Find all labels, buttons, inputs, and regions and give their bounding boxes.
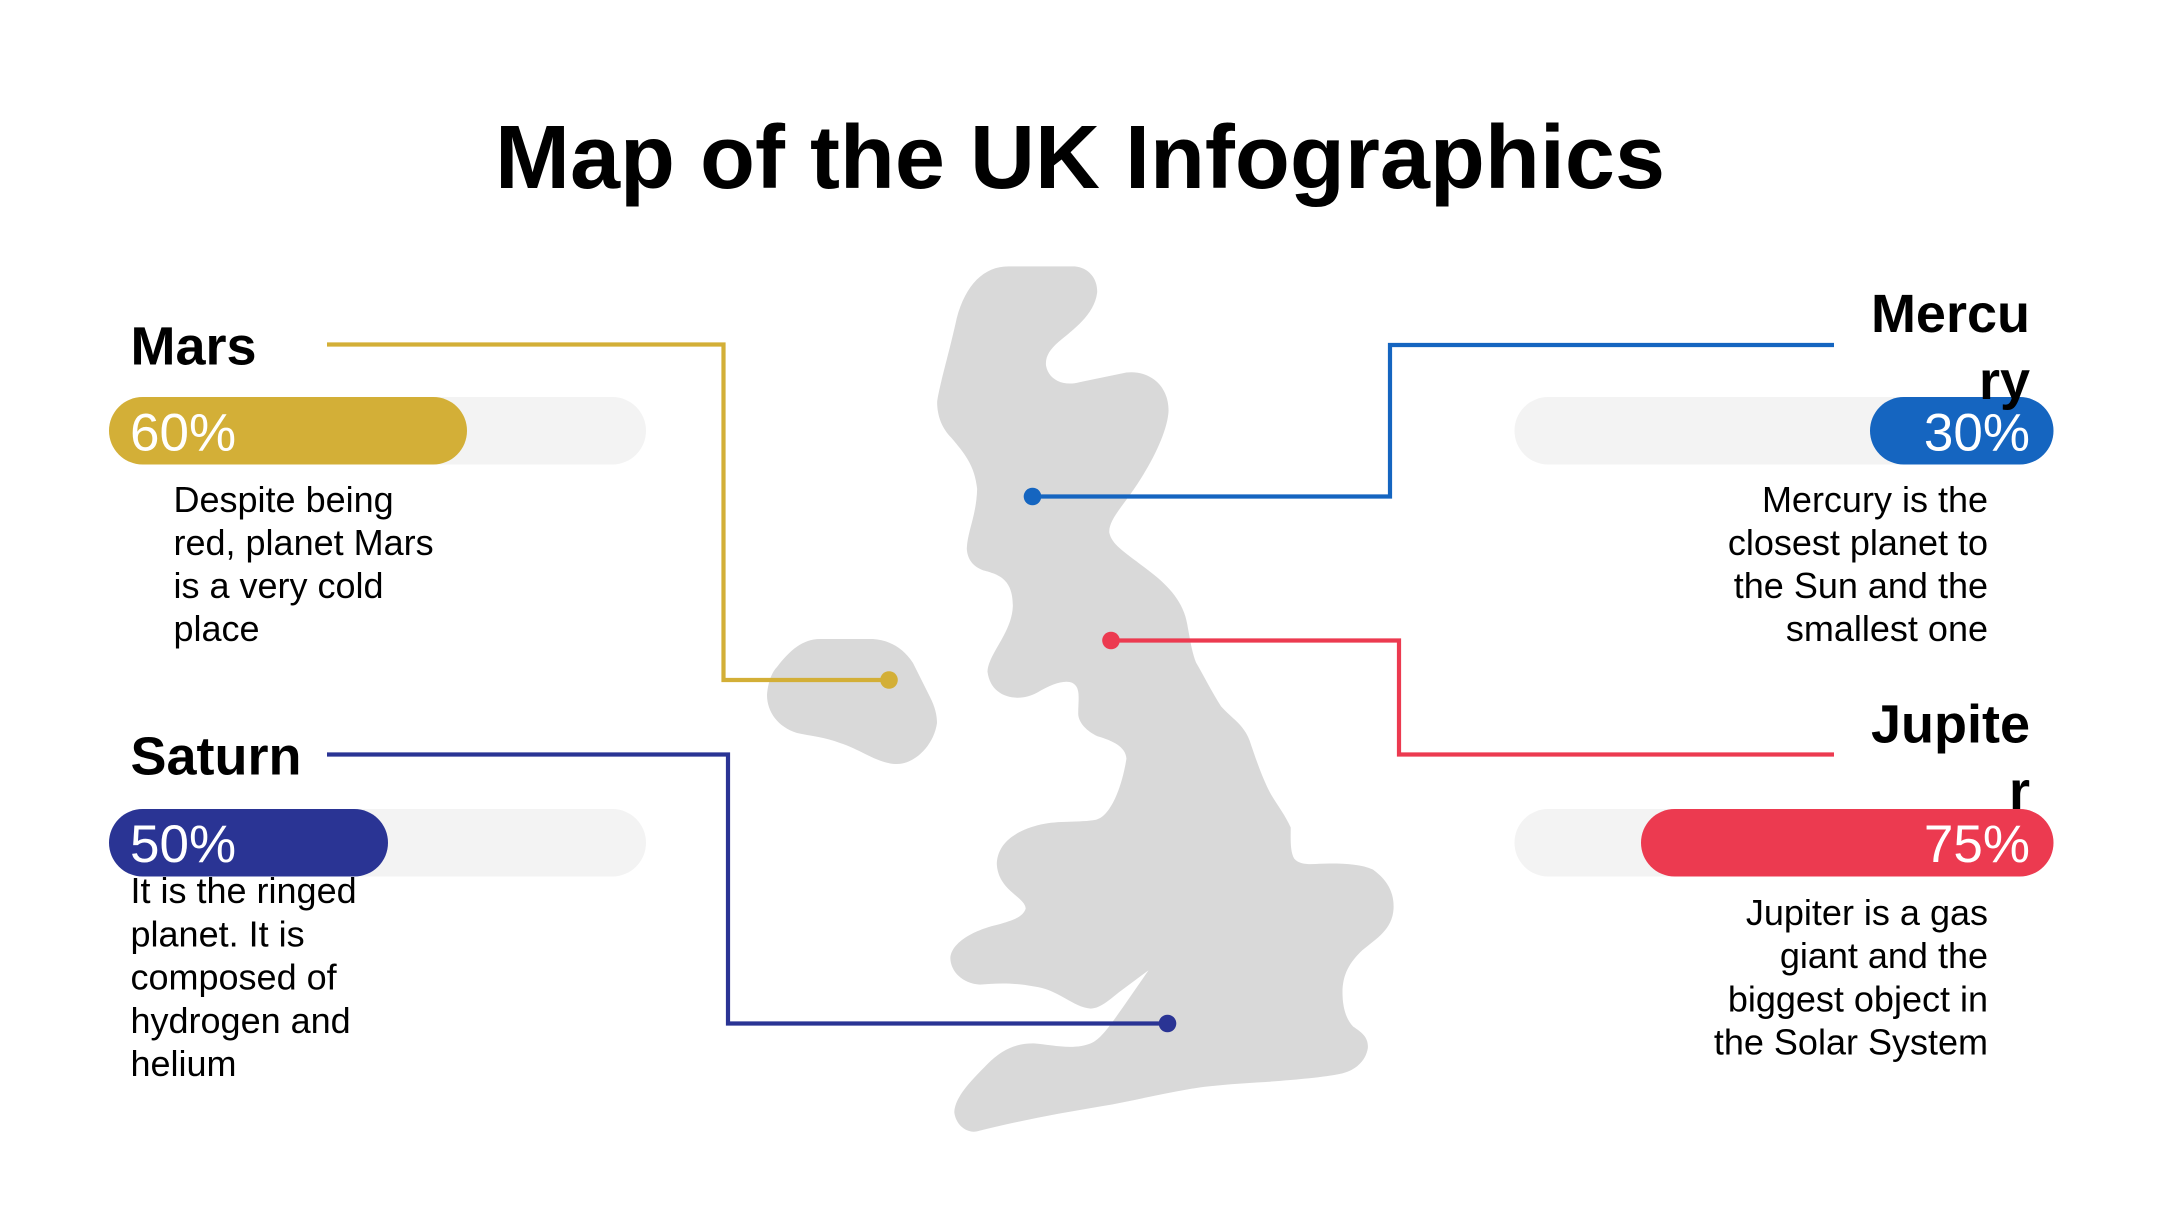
progress track: Mars [109, 397, 646, 464]
panel: Jupiter [1102, 632, 2054, 1063]
panel: Mars [109, 316, 898, 689]
body text: Saturn: helium [130, 1043, 237, 1084]
body text: Jupiter: giant and the [1780, 935, 1988, 976]
body text: Mercury [1728, 479, 1988, 649]
body text: Mars: Despite being [174, 479, 394, 520]
progress fill: Mars [109, 397, 467, 464]
body text: Mars: is a very cold [174, 565, 384, 606]
heading: Mercury: Mercu [1871, 284, 2030, 344]
body text: Mars: place [174, 608, 260, 649]
heading: Jupiter: r [2009, 761, 2030, 821]
panel: Saturn [109, 726, 1176, 1084]
percent: Jupiter: 75% [1924, 815, 2030, 874]
progress track: Jupiter [1514, 809, 2054, 876]
percent: Mercury: 30% [1924, 404, 2030, 462]
body text: Mars [174, 479, 434, 649]
progress track: Saturn [109, 809, 646, 876]
body text: Mercury: closest planet to [1728, 522, 1988, 563]
marker: Mars [880, 671, 898, 689]
body text: Mars: red, planet Mars [174, 522, 434, 563]
body text: Saturn: planet. It is [130, 913, 305, 954]
body text: Saturn: It is the ringed [130, 870, 357, 911]
map of the UK [767, 266, 1394, 1132]
progress fill: Saturn [109, 809, 388, 876]
body text: Mercury: the Sun and the [1734, 565, 1988, 606]
map: Ireland [767, 639, 937, 764]
percent: Saturn: 50% [130, 815, 236, 874]
body text: Jupiter: Jupiter is a gas [1746, 892, 1988, 933]
progress fill: Mercury [1870, 397, 2054, 464]
body text: Jupiter: the Solar System [1714, 1022, 1988, 1063]
percent: Mars: 60% [130, 404, 236, 462]
body text: Jupiter: biggest object in [1728, 978, 1988, 1019]
heading: Mercury [1871, 284, 2030, 411]
body text: Saturn: hydrogen and [130, 1000, 351, 1041]
connector: Mercury [1032, 345, 1834, 496]
body text: Mercury: smallest one [1786, 608, 1988, 649]
heading: Jupiter: Jupite [1871, 694, 2030, 754]
panel: Mercury [1024, 284, 2054, 649]
progress track: Mercury [1514, 397, 2054, 464]
connector: Saturn [327, 754, 1167, 1024]
marker: Mercury [1024, 488, 1041, 505]
connector: Mars [327, 344, 889, 680]
heading: Jupiter [1871, 694, 2030, 821]
marker: Saturn [1159, 1015, 1176, 1032]
progress fill: Jupiter [1641, 809, 2054, 876]
map: Great Britain [937, 266, 1394, 1132]
title: Map of the UK Infographics [495, 108, 1665, 208]
body text: Saturn: composed of [130, 957, 338, 998]
heading: Mercury: ry [1979, 351, 2030, 411]
heading: Mars: Mars [130, 316, 257, 376]
body text: Saturn [130, 870, 357, 1084]
marker: Jupiter [1102, 632, 1120, 649]
body text: Mercury: Mercury is the [1762, 479, 1988, 520]
body text: Jupiter [1714, 892, 1988, 1063]
heading: Saturn: Saturn [130, 726, 302, 786]
connector: Jupiter [1111, 640, 1834, 754]
